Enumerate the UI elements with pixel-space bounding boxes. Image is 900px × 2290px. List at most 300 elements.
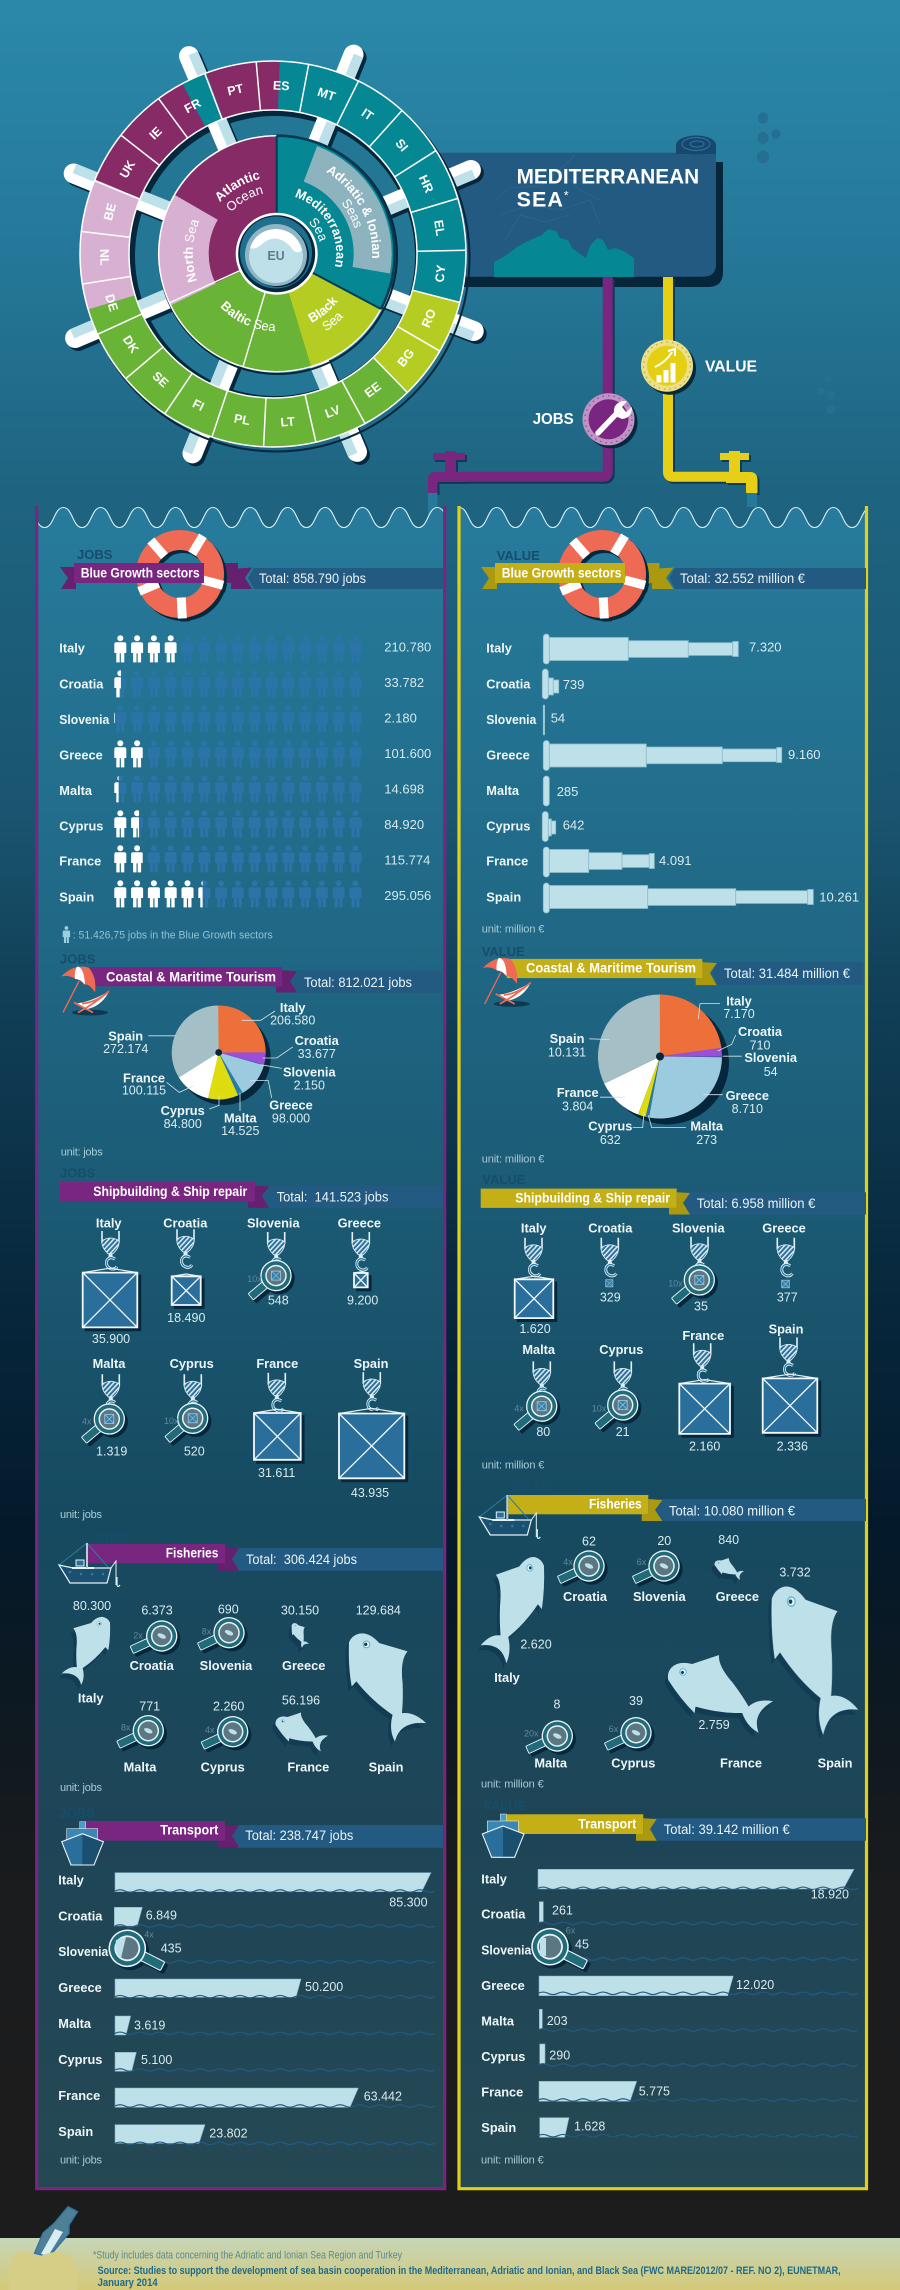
outer ring of member states: PT xyxy=(226,81,245,99)
pie chart: tourism jobs: 2.150 xyxy=(294,1078,325,1092)
panel: value xyxy=(459,506,900,2190)
crane chart: shipbuilding value: 21 xyxy=(616,1425,630,1439)
pie chart: tourism value: Slovenia xyxy=(744,1050,798,1065)
bar chart: transport value: 12.020 xyxy=(736,1978,774,1992)
fish chart: fisheries jobs: 2.260 xyxy=(213,1700,244,1714)
fish chart: fisheries jobs: Spain xyxy=(369,1760,404,1775)
fish chart: fisheries jobs: Malta xyxy=(124,1760,157,1775)
total bar: Total: 141.523 jobs xyxy=(277,1190,389,1205)
icon: ship xyxy=(62,1822,103,1865)
source note xyxy=(98,2265,841,2289)
telescope chart: value by country: Spain xyxy=(486,889,521,904)
outer ring of member states: MT xyxy=(316,85,338,104)
fish chart: fisheries jobs: 30.150 xyxy=(281,1603,319,1617)
ribbon: Coastal and Maritime Tourism: Coastal & Maritime Tourism xyxy=(106,969,276,984)
fish chart: fisheries jobs: 56.196 xyxy=(282,1693,320,1707)
bar chart: transport value: 18.920 xyxy=(811,1888,849,1902)
crane chart: shipbuilding value: 10x xyxy=(668,1279,683,1289)
outer ring of member states: SE xyxy=(149,369,171,390)
label: jobs: JOBS xyxy=(533,411,574,428)
outer ring of member states: BE xyxy=(101,202,119,222)
inner disc of sea basins: Ocean xyxy=(226,187,263,210)
legend: one pictogram: : 51.426,75 jobs in the Blue Growth sectors xyxy=(73,929,273,941)
ribbon: Shipbuilding and Ship repair: Shipbuilding & Ship repair xyxy=(93,1184,248,1199)
pie chart: tourism jobs: 14.525 xyxy=(221,1124,259,1138)
crane chart: shipbuilding value: 1.620 xyxy=(519,1322,551,1336)
icon: lifebuoy xyxy=(559,534,646,619)
ribbon: Transport: Transport xyxy=(578,1816,637,1831)
inner disc of sea basins: Mediterranean xyxy=(295,188,344,267)
outer ring of member states: EL xyxy=(431,219,447,237)
bar chart: transport value: 203 xyxy=(547,2014,568,2028)
pie chart: tourism jobs: 272.174 xyxy=(103,1042,148,1056)
ship wheel diagram xyxy=(64,44,487,466)
pie chart: tourism value: 632 xyxy=(600,1133,621,1147)
ribbon back xyxy=(625,563,674,589)
fish chart: fisheries jobs: 6.373 xyxy=(141,1603,173,1617)
total bar: Total: 812.021 jobs xyxy=(304,975,412,990)
pictogram chart: jobs by country: 33.782 xyxy=(384,675,424,690)
outer ring of member states: NL xyxy=(97,249,111,266)
crane chart: shipbuilding jobs: Italy xyxy=(96,1216,122,1230)
fish chart: fisheries jobs: Greece xyxy=(282,1658,325,1673)
fish chart: fisheries value: 6x xyxy=(637,1557,647,1567)
pie chart: tourism value: Malta xyxy=(690,1118,724,1134)
pie chart: tourism jobs: Spain xyxy=(108,1028,143,1043)
bar chart: transport jobs: 435 xyxy=(161,1941,182,1955)
icon: beach umbrella xyxy=(61,967,109,1015)
fish chart: fisheries value: Spain xyxy=(818,1756,853,1771)
total bar xyxy=(231,1548,443,1571)
water streams xyxy=(428,493,757,525)
pie chart: tourism value: 3.804 xyxy=(562,1100,593,1114)
bar chart: transport jobs: Italy xyxy=(58,1872,85,1887)
icon: scroll roll xyxy=(676,136,716,154)
Mediterranean Sea scroll sign xyxy=(438,136,723,287)
crane chart: shipbuilding jobs xyxy=(74,1216,404,1500)
telescope chart: value by country: 285 xyxy=(557,784,578,799)
telescope chart: value by country: 10.261 xyxy=(819,890,859,905)
pie chart: tourism value: Croatia xyxy=(738,1024,783,1039)
ribbon: Blue Growth sectors: Blue Growth sectors xyxy=(81,566,200,580)
pie chart: tourism jobs: 33.677 xyxy=(298,1047,336,1061)
telescope chart: value by country: France xyxy=(486,854,528,869)
pie chart: tourism value: 273 xyxy=(696,1133,717,1147)
pie chart: tourism jobs xyxy=(103,1000,340,1138)
pie chart: tourism value: Cyprus xyxy=(588,1118,632,1134)
section: Blue Growth sectors value xyxy=(481,534,866,619)
bar chart: transport value: Malta xyxy=(481,2013,515,2028)
ribbon: Shipbuilding and Ship repair xyxy=(60,1182,269,1208)
section: Fisheries jobs xyxy=(59,1530,443,1794)
bar chart: transport value: 1.628 xyxy=(574,2120,605,2134)
bar chart: transport jobs: Slovenia xyxy=(58,1944,109,1959)
pictogram chart: jobs by country: Spain xyxy=(59,889,94,904)
inner disc of sea basins: Baltic Sea xyxy=(220,300,276,332)
outer ring of member states: FI xyxy=(190,397,206,414)
icon: fishing boat xyxy=(479,1495,540,1538)
unit note: unit: jobs xyxy=(61,1146,103,1158)
outer ring of member states: FR xyxy=(182,96,203,116)
fish chart: fisheries value: Croatia xyxy=(563,1589,608,1604)
bar chart: transport value xyxy=(481,1869,858,2137)
bar chart: transport jobs xyxy=(58,1872,435,2145)
bar chart: transport jobs: 63.442 xyxy=(364,2090,402,2104)
pie chart: tourism jobs: France xyxy=(123,1070,165,1085)
pictogram chart: jobs by country: 2.180 xyxy=(384,711,417,726)
jobs pipe and tap xyxy=(428,277,608,493)
inner disc of sea basins: Adriatic & Ionian xyxy=(326,166,381,258)
crane chart: shipbuilding value: 35 xyxy=(694,1300,708,1314)
unit note: unit: jobs xyxy=(60,2154,102,2166)
section: Coastal and Maritime Tourism value xyxy=(482,944,864,1166)
bar chart: transport jobs: Spain xyxy=(58,2124,93,2139)
inner disc of sea basins: Atlantic xyxy=(216,172,260,202)
crane chart: shipbuilding jobs: Spain xyxy=(354,1356,389,1371)
bar chart: transport value: France xyxy=(481,2084,523,2099)
heading: value label: VALUE xyxy=(482,944,525,959)
telescope chart: value by country: Malta xyxy=(486,783,520,798)
pictogram chart: jobs by country: Croatia xyxy=(59,676,104,691)
pie chart: tourism jobs: 84.800 xyxy=(164,1117,202,1131)
fish chart: fisheries jobs: Italy xyxy=(78,1691,104,1706)
telescope chart: value by country: Croatia xyxy=(486,676,531,691)
inner disc of sea basins xyxy=(158,134,398,375)
crane chart: shipbuilding jobs: 520 xyxy=(184,1444,205,1458)
crane chart: shipbuilding jobs: Malta xyxy=(93,1356,126,1371)
outer ring of member states: PL xyxy=(233,411,251,428)
pie chart: tourism jobs: 100.115 xyxy=(122,1084,166,1098)
fish chart: fisheries value: 62 xyxy=(582,1535,596,1549)
total bar: Total: 306.424 jobs xyxy=(246,1552,357,1567)
heading: value label: VALUE xyxy=(510,1480,553,1495)
fish chart: fisheries value: Italy xyxy=(494,1670,521,1685)
fish chart: fisheries jobs: 4x xyxy=(205,1725,215,1735)
fish chart: fisheries jobs: Croatia xyxy=(130,1658,175,1673)
pictogram chart: jobs by country: 115.774 xyxy=(384,853,430,868)
crane chart: shipbuilding jobs: Cyprus xyxy=(170,1356,214,1371)
total bar xyxy=(248,568,443,589)
outer ring of member states xyxy=(35,16,511,492)
bar chart: transport jobs: 5.100 xyxy=(141,2053,172,2067)
fish chart: fisheries value: 2.759 xyxy=(698,1718,730,1732)
outer ring of member states: BG xyxy=(395,346,417,370)
crane chart: shipbuilding jobs: 9.200 xyxy=(347,1293,378,1307)
heading: value label: VALUE xyxy=(497,548,540,563)
fish chart: fisheries value: 3.732 xyxy=(779,1566,811,1580)
telescope chart: value by country: 4.091 xyxy=(659,853,692,868)
telescope chart: value by country xyxy=(486,634,859,913)
footnote: *Study includes data concerning the Adriatic and Ionian Sea Region and Turkey xyxy=(93,2249,402,2261)
bar chart: transport jobs: Greece xyxy=(58,1980,102,1995)
pie chart: tourism value: 8.710 xyxy=(732,1102,763,1116)
pie chart: tourism jobs: Croatia xyxy=(295,1033,340,1048)
bar chart: transport value: Spain xyxy=(481,2120,516,2135)
bar chart: transport jobs: 85.300 xyxy=(389,1896,428,1910)
crane chart: shipbuilding value: France xyxy=(682,1328,724,1343)
crane chart: shipbuilding value: Cyprus xyxy=(599,1342,643,1357)
outer ring of member states: SI xyxy=(392,136,411,154)
total bar xyxy=(290,970,442,993)
total bar xyxy=(231,1825,443,1848)
total bar xyxy=(654,1499,866,1521)
inner disc of sea basins: Sea xyxy=(310,218,326,242)
bar chart: transport value: 261 xyxy=(552,1903,573,1917)
fish chart: fisheries jobs: 2x xyxy=(133,1630,143,1640)
outer ring of member states: HR xyxy=(416,173,436,195)
bar chart: transport value: 5.775 xyxy=(639,2085,670,2099)
ribbon: Coastal and Maritime Tourism xyxy=(507,959,717,985)
crane chart: shipbuilding value: 329 xyxy=(600,1290,621,1304)
outer ring of member states: DK xyxy=(120,333,141,356)
bar chart: transport value: Cyprus xyxy=(481,2049,525,2064)
inner disc of sea basins: Sea xyxy=(322,314,344,330)
fish chart: fisheries jobs: Cyprus xyxy=(201,1760,245,1775)
fish chart: fisheries value: Malta xyxy=(534,1756,568,1771)
sign title: MEDITERRANEAN xyxy=(517,164,699,188)
total bar: Total: 238.747 jobs xyxy=(245,1828,354,1843)
bar chart: transport jobs: 4x xyxy=(144,1929,154,1939)
total bar: Total: 32.552 million € xyxy=(680,571,805,586)
pie chart: tourism value: 710 xyxy=(750,1038,770,1052)
outer ring of member states: RO xyxy=(419,307,439,330)
fish chart: fisheries jobs: 690 xyxy=(218,1602,239,1616)
crane chart: shipbuilding value: Spain xyxy=(769,1321,804,1336)
bar chart: transport jobs: France xyxy=(58,2088,100,2103)
pictogram chart: jobs by country: 101.600 xyxy=(384,746,431,761)
total bar xyxy=(669,568,866,589)
fish chart: fisheries jobs: Slovenia xyxy=(200,1658,253,1673)
section: Transport value xyxy=(481,1798,866,2166)
crane chart: shipbuilding value: Italy xyxy=(521,1220,547,1235)
crane chart: shipbuilding value: Malta xyxy=(522,1342,556,1357)
bar chart: transport value: 6x xyxy=(566,1925,576,1935)
pie chart: tourism value: Greece xyxy=(726,1088,769,1103)
total bar: Total: 858.790 jobs xyxy=(259,571,366,586)
sign title line 2: * xyxy=(564,189,569,203)
pie chart: tourism value xyxy=(548,994,798,1147)
outer ring of member states: DE xyxy=(102,292,121,313)
bar chart: transport value: Italy xyxy=(481,1871,508,1886)
crane chart: shipbuilding jobs: 43.935 xyxy=(351,1486,389,1500)
ribbon: Coastal and Maritime Tourism xyxy=(87,967,297,992)
pictogram chart: jobs by country: Slovenia xyxy=(59,712,110,727)
pictogram chart: jobs by country: Malta xyxy=(59,783,93,798)
bar chart: transport jobs: 23.802 xyxy=(209,2127,248,2141)
panel: jobs xyxy=(26,506,475,2190)
icon: bottle in sand xyxy=(9,2207,78,2290)
telescope chart: value by country: 739 xyxy=(563,677,584,692)
bar chart: transport value: Slovenia xyxy=(481,1942,532,1957)
fish chart: fisheries value: 6x xyxy=(609,1724,619,1734)
fish chart: fisheries value: 2.620 xyxy=(520,1637,552,1651)
sign title line 2: SEA xyxy=(517,188,563,212)
unit note: unit: million € xyxy=(482,924,544,936)
fish chart: fisheries value: 39 xyxy=(629,1694,643,1708)
ribbon back xyxy=(205,563,252,589)
outer ring of member states: EE xyxy=(362,379,384,401)
heading: jobs label: JOBS xyxy=(60,1166,96,1180)
source note: January 2014 xyxy=(98,2277,158,2289)
inner disc of sea basins: Seas xyxy=(342,199,361,228)
pictogram chart: jobs by country: Italy xyxy=(59,641,86,656)
section: Coastal and Maritime Tourism jobs xyxy=(60,951,442,1158)
section: Fisheries value xyxy=(479,1480,866,1790)
wheel spokes xyxy=(61,42,487,466)
icon: beach umbrella xyxy=(483,958,531,1007)
inner disc of sea basins: Black xyxy=(308,296,338,323)
crane chart: shipbuilding jobs: 4x xyxy=(82,1417,92,1427)
ribbon: Shipbuilding and Ship repair: Shipbuilding & Ship repair xyxy=(515,1191,671,1206)
crane chart: shipbuilding jobs: 35.900 xyxy=(92,1332,130,1346)
pie chart: tourism jobs: Slovenia xyxy=(283,1064,336,1080)
pie chart: tourism jobs: 206.580 xyxy=(270,1014,315,1028)
pie chart: tourism value: Spain xyxy=(550,1031,585,1046)
crane chart: shipbuilding jobs: Croatia xyxy=(163,1216,208,1230)
fish chart: fisheries value: Slovenia xyxy=(633,1589,686,1604)
telescope chart: value by country: 7.320 xyxy=(749,640,782,655)
crane chart: shipbuilding jobs: 31.611 xyxy=(258,1466,295,1480)
badge: jobs wrench xyxy=(582,393,634,445)
inner disc of sea basins: North Sea xyxy=(183,220,200,283)
pictogram chart: jobs by country: Greece xyxy=(59,747,103,762)
total bar: Total: 31.484 million € xyxy=(724,966,850,981)
fish chart: fisheries value: 8 xyxy=(554,1697,561,1711)
telescope chart: value by country: Greece xyxy=(486,747,530,762)
outer ring of member states: LV xyxy=(323,402,343,421)
total bar: Total: 39.142 million € xyxy=(664,1822,790,1837)
crane chart: shipbuilding value: 2.336 xyxy=(777,1440,808,1454)
outer ring of member states: UK xyxy=(117,158,138,181)
fish chart: fisheries jobs: 8x xyxy=(121,1723,131,1733)
crane chart: shipbuilding value: 4x xyxy=(514,1404,524,1414)
crane chart: shipbuilding jobs: 10x xyxy=(164,1416,179,1426)
fish chart: fisheries value: 840 xyxy=(718,1533,739,1547)
ribbon: Transport xyxy=(85,1821,239,1847)
ribbon: Blue Growth sectors xyxy=(481,563,625,589)
unit note: unit: million € xyxy=(482,1460,544,1472)
unit note: unit: million € xyxy=(482,1154,544,1166)
crane chart: shipbuilding jobs: 18.490 xyxy=(167,1311,205,1325)
outer ring of member states: CY xyxy=(433,264,449,283)
bubbles xyxy=(757,112,836,414)
icon: fishing boat xyxy=(59,1543,120,1586)
ribbon: Fisheries xyxy=(88,1544,239,1571)
fish chart: fisheries jobs: France xyxy=(287,1760,329,1775)
crane chart: shipbuilding value xyxy=(507,1220,817,1454)
crane chart: shipbuilding value: 10x xyxy=(592,1404,607,1414)
pictogram chart: jobs by country: 210.780 xyxy=(384,640,431,655)
ribbon: Fisheries: Fisheries xyxy=(589,1497,642,1512)
section: Shipbuilding and Ship repair value xyxy=(481,1172,866,1472)
telescope chart: value by country: 642 xyxy=(563,817,584,832)
fish chart: fisheries value: 20x xyxy=(524,1729,539,1739)
bar chart: transport jobs: Cyprus xyxy=(58,2052,102,2067)
heading: jobs label: JOBS xyxy=(92,1530,127,1545)
pie chart: tourism jobs: 98.000 xyxy=(272,1111,310,1125)
label: value: VALUE xyxy=(705,359,757,376)
bar chart: transport value: 45 xyxy=(575,1937,589,1951)
pie chart: tourism value: 54 xyxy=(764,1065,778,1079)
section: Blue Growth sectors jobs xyxy=(60,534,443,619)
fish chart: fisheries value: 4x xyxy=(563,1557,573,1567)
total bar xyxy=(681,1192,866,1214)
outer ring of member states: IT xyxy=(359,106,376,124)
pictogram chart: jobs by country: 295.056 xyxy=(384,888,431,903)
pie chart: tourism jobs: Cyprus xyxy=(161,1103,205,1118)
ribbon: Fisheries xyxy=(508,1495,662,1521)
crane chart: shipbuilding jobs: Greece xyxy=(338,1216,381,1230)
bar chart: transport jobs: Croatia xyxy=(58,1908,103,1923)
crane chart: shipbuilding value: Croatia xyxy=(588,1220,633,1235)
central EU hub: EU xyxy=(267,249,285,263)
fish chart: fisheries jobs: 771 xyxy=(139,1700,160,1714)
map of the Mediterranean xyxy=(494,155,634,277)
crane chart: shipbuilding jobs: 10x xyxy=(247,1274,262,1284)
pictogram chart: jobs by country: 14.698 xyxy=(384,782,424,797)
total bar xyxy=(260,1186,443,1208)
ribbon: Coastal and Maritime Tourism: Coastal & Maritime Tourism xyxy=(526,961,696,976)
section: Transport jobs xyxy=(58,1805,443,2166)
icon: ship xyxy=(482,1814,524,1857)
outer ring of member states: IE xyxy=(147,124,165,142)
telescope chart: value by country: 54 xyxy=(551,711,565,726)
icon: lifebuoy xyxy=(137,534,224,619)
crane chart: shipbuilding jobs: 548 xyxy=(268,1293,289,1307)
pie chart: tourism value: France xyxy=(557,1085,599,1100)
ribbon: Transport xyxy=(506,1814,657,1841)
total bar xyxy=(712,962,864,985)
telescope chart: value by country: Cyprus xyxy=(486,818,530,833)
crane chart: shipbuilding value: 2.160 xyxy=(689,1440,720,1454)
fish chart: fisheries jobs xyxy=(62,1599,426,1775)
bar chart: transport jobs: 6.849 xyxy=(146,1908,177,1922)
pie chart: tourism value: 7.170 xyxy=(723,1007,755,1021)
bar chart: transport jobs: 3.619 xyxy=(134,2018,165,2032)
outer ring of member states: LT xyxy=(280,414,296,430)
central EU hub xyxy=(236,213,318,295)
fish chart: fisheries jobs: 8x xyxy=(202,1626,212,1636)
crane chart: shipbuilding jobs: France xyxy=(256,1356,298,1371)
bar chart: transport value: Greece xyxy=(481,1978,525,1993)
value pipe and tap xyxy=(668,277,758,493)
fish chart: fisheries value xyxy=(481,1533,858,1771)
crane chart: shipbuilding value: 80 xyxy=(536,1425,550,1439)
ribbon: Blue Growth sectors: Blue Growth sectors xyxy=(502,566,621,580)
fish chart: fisheries value: Greece xyxy=(716,1589,759,1604)
heading: value label: VALUE xyxy=(483,1798,527,1813)
total bar xyxy=(649,1818,866,1841)
outer ring of member states: ES xyxy=(273,79,290,93)
total bar: Total: 6.958 million € xyxy=(697,1196,816,1211)
crane chart: shipbuilding jobs: Slovenia xyxy=(247,1216,300,1230)
fish chart: fisheries value: Cyprus xyxy=(611,1756,655,1771)
total bar: Total: 10.080 million € xyxy=(669,1503,795,1518)
crane chart: shipbuilding value: 377 xyxy=(777,1290,798,1304)
ribbon: Fisheries: Fisheries xyxy=(166,1545,218,1560)
heading: jobs label: JOBS xyxy=(77,547,113,562)
pictogram chart: jobs by country xyxy=(59,635,431,907)
bar chart: transport jobs: Malta xyxy=(58,2016,92,2031)
bar chart: transport value: 290 xyxy=(549,2048,570,2062)
fish chart: fisheries value: 20 xyxy=(657,1534,671,1548)
crane chart: shipbuilding value: Slovenia xyxy=(672,1220,725,1235)
pictogram chart: jobs by country: Cyprus xyxy=(59,818,103,833)
unit note: unit: jobs xyxy=(60,1509,102,1521)
crane chart: shipbuilding jobs: 1.319 xyxy=(96,1444,127,1458)
fish chart: fisheries jobs: 80.300 xyxy=(73,1599,111,1613)
ribbon: Transport: Transport xyxy=(160,1822,219,1837)
